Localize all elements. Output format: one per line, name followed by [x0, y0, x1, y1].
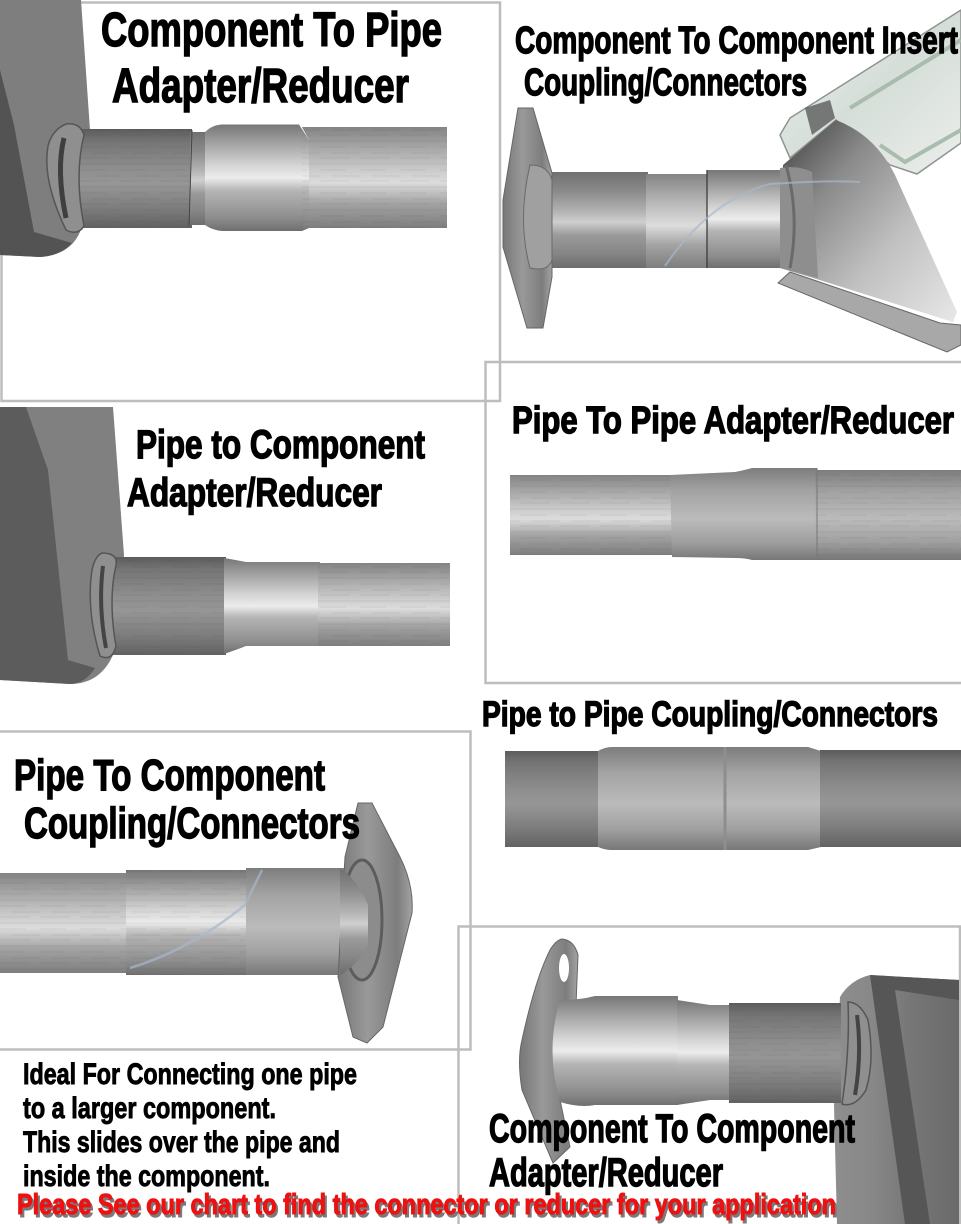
panel frame: pipe to pipe adapter/reducer: [486, 362, 961, 683]
heading: [14, 751, 360, 848]
panel frame: [0, 732, 470, 1050]
heading: Adapter/Reducer: [112, 60, 409, 113]
description text: Ideal For Connecting one pipe: [23, 1058, 357, 1091]
component body: [834, 975, 959, 1224]
catalytic converter heat shield: [780, 10, 961, 174]
panel frame: [2, 2, 500, 401]
pipe assembly: [552, 996, 841, 1106]
heading: Component To Pipe: [101, 4, 442, 57]
heading: Pipe to Component: [136, 423, 425, 467]
flange holes: [559, 954, 569, 982]
heading: Adapter/Reducer: [127, 471, 382, 515]
panel: component to pipe adapter/reducer: [0, 0, 500, 401]
heading: Adapter/Reducer: [489, 1151, 723, 1195]
pipe assembly: [505, 747, 961, 850]
lower heat shield: [778, 272, 961, 352]
heading: [127, 423, 425, 515]
flange: [338, 803, 412, 1043]
panel: pipe to pipe adapter/reducer: [510, 400, 961, 560]
flange: [520, 939, 578, 1163]
pipe assembly: [100, 557, 450, 655]
weld: [842, 1002, 871, 1105]
pipe sections: [545, 165, 818, 278]
panel: pipe to pipe coupling/connectors: [482, 695, 961, 850]
description text: [23, 1058, 357, 1193]
panel: pipe to component coupling/connectors: [0, 732, 470, 1050]
flange collar: [524, 165, 552, 269]
heading: Coupling/Connectors: [24, 799, 360, 848]
panel: component to component adapter/reducer: [458, 926, 960, 1224]
heading: Pipe To Component: [14, 751, 325, 800]
description text: This slides over the pipe and: [23, 1126, 340, 1159]
component body: [0, 407, 124, 684]
heading: [489, 1107, 855, 1195]
pipe assembly: [510, 468, 961, 560]
component body: [0, 0, 90, 257]
component rim band: [0, 70, 72, 257]
pipe assembly: [0, 868, 346, 975]
panel: pipe to component adapter/reducer: [0, 407, 450, 684]
flange: [503, 108, 552, 328]
heading: [515, 20, 958, 104]
blue mark: [665, 181, 860, 266]
heading: Coupling/Connectors: [524, 62, 807, 104]
panel frame: [458, 926, 960, 1224]
panel: component to component insert coupling/connectors: [503, 10, 961, 352]
pipe assembly: [76, 124, 447, 231]
pipe end: [340, 868, 368, 975]
flange collar: [342, 860, 382, 980]
heading: [101, 4, 442, 113]
description text: inside the component.: [23, 1160, 270, 1193]
component rim band: [0, 407, 95, 684]
blue mark: [130, 870, 262, 968]
weld: [47, 124, 84, 232]
component rim band: [870, 975, 959, 1224]
weld: [90, 553, 116, 658]
description text: to a larger component.: [23, 1092, 276, 1125]
catalytic converter cone: [780, 120, 957, 322]
